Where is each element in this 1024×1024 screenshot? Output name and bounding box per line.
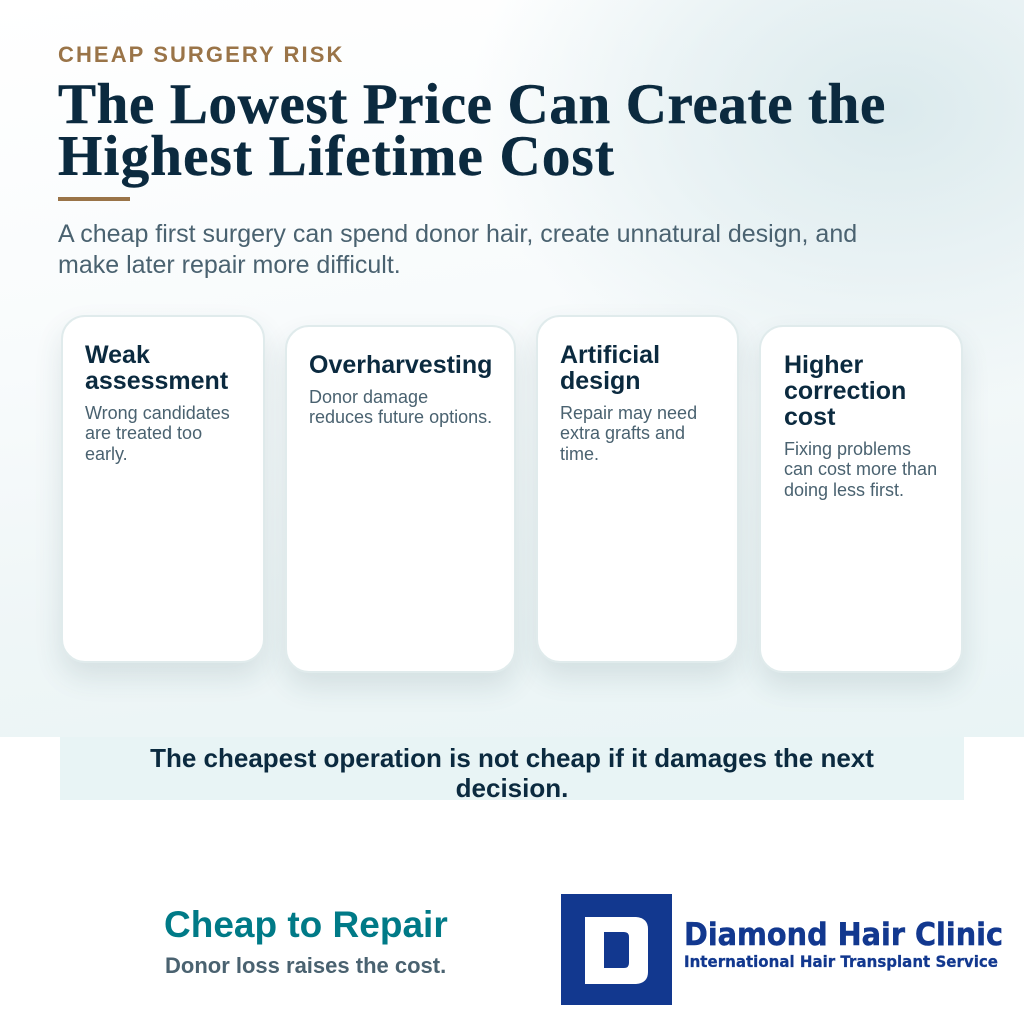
text: weak assessment detail [85,403,230,464]
subtitle: make later repair more difficult. [58,251,401,279]
panel: weak assessment [61,315,265,663]
logo tagline: International Hair Transplant Service [684,952,998,971]
title: The Lowest Price Can Create the [58,73,886,136]
text: higher correction cost detail: can cost more than [784,459,937,479]
heading: artificial design: design [560,367,641,395]
text: higher correction cost detail: doing less first. [784,480,904,500]
title: Highest Lifetime Cost [58,125,615,188]
heading: overharvesting: Overharvesting [309,351,492,379]
heading: weak assessment: Weak [85,341,150,369]
footer heading: cheap to repair: Cheap to Repair [164,904,448,945]
heading: higher correction cost: correction [784,377,906,405]
text: weak assessment detail: early. [85,444,128,464]
heading: weak assessment: assessment [85,367,228,395]
panel: higher correction cost [759,325,963,673]
heading: artificial design: Artificial [560,341,660,369]
heading: higher correction cost [784,351,906,431]
heading: artificial design [560,341,660,395]
subtitle [58,220,857,279]
heading: weak assessment [85,341,228,395]
text: overharvesting detail: reduces future options. [309,407,492,427]
icon: D mark [561,894,672,1005]
text: weak assessment detail: are treated too [85,423,202,443]
heading: higher correction cost: cost [784,403,835,431]
callout band: The cheapest operation is not cheap if it damages the next [150,743,874,773]
text: overharvesting detail: Donor damage [309,387,428,407]
text: artificial design detail: Repair may need [560,403,697,423]
text: artificial design detail: extra grafts and [560,423,685,443]
background panel [0,0,1024,737]
text: artificial design detail [560,403,697,464]
callout band [60,737,964,800]
panel: overharvesting [285,325,516,673]
heading: higher correction cost: Higher [784,351,863,379]
logo wordmark: Diamond Hair Clinic [684,917,1003,953]
text: weak assessment detail: Wrong candidates [85,403,230,423]
text: artificial design detail: time. [560,444,599,464]
text: higher correction cost detail [784,439,937,500]
eyebrow: cheap surgery risk: CHEAP SURGERY RISK [58,42,344,67]
footer subtext: Donor loss raises the cost. [165,953,446,978]
text: higher correction cost detail: Fixing problems [784,439,911,459]
logo: diamond hair clinic [561,894,1003,1005]
panel: artificial design [536,315,739,663]
title accent rule [58,197,130,201]
subtitle: A cheap first surgery can spend donor hair, create unnatural design, and [58,220,857,248]
text: overharvesting detail [309,387,492,427]
title [58,73,886,188]
